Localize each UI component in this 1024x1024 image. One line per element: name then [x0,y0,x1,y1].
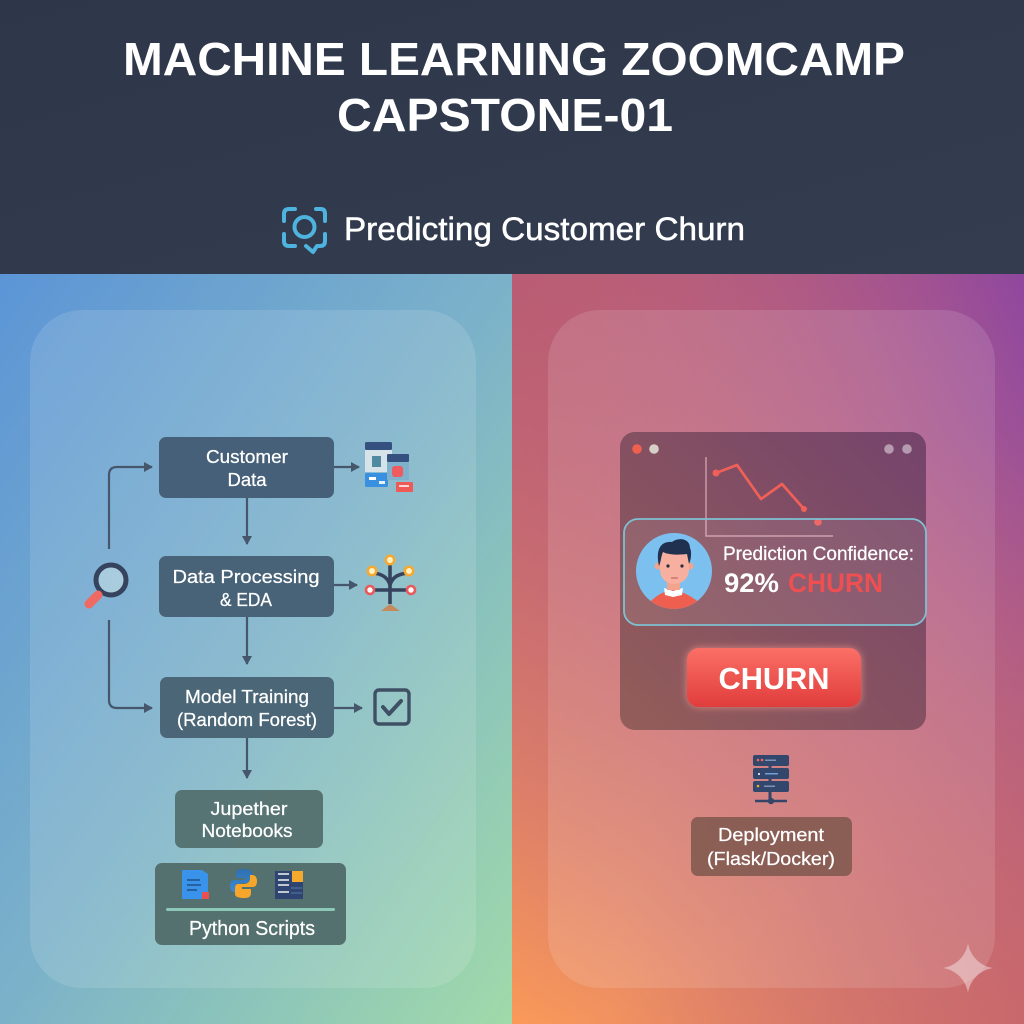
step: customer data [159,437,334,498]
window controls [632,444,912,454]
icon: camera focus speech bubble [284,209,325,252]
panel: ML pipeline card [30,310,476,988]
arrow: customer data to processing [246,498,248,544]
icon: sparkle [943,943,993,993]
header band [0,0,1024,274]
icon: python logo [230,869,257,898]
panel: prediction card [548,310,995,988]
panel: left background [0,274,512,1024]
prediction confidence callout [624,519,926,625]
title: CAPSTONE-01 [337,89,673,141]
step: model training [160,677,334,738]
arrow: processing to icon [334,584,357,586]
churn button [687,648,861,707]
title: MACHINE LEARNING ZOOMCAMP [123,33,905,85]
icon: customer avatar [636,533,712,612]
panel: app window [620,432,926,730]
prediction confidence callout: 92% [724,568,779,598]
deployment label: (Flask/Docker) [707,848,835,869]
arrow: processing to training [246,617,248,664]
icon: decision tree [366,556,415,611]
step: data processing and EDA: Data Processing [172,566,320,587]
step: data processing and EDA: & EDA [220,589,273,610]
subtitle: Predicting Customer Churn [344,211,745,247]
deployment label [691,817,852,876]
arrow: magnifier up to customer data [109,467,152,549]
step: customer data: Data [228,469,267,490]
step: notebooks: Notebooks [202,820,292,841]
step: model training: Model Training [185,686,309,707]
churn button: CHURN [718,661,830,696]
step: customer data: Customer [206,446,288,467]
arrow: training to notebooks [246,738,248,778]
panel: right background [512,274,1024,1024]
deployment label: Deployment [718,824,824,845]
arrow: magnifier down to model training [109,620,152,708]
arrow: customer data to icon [334,466,359,468]
panel: python scripts [155,863,346,945]
arrow: training to icon [334,707,362,709]
step: data processing and EDA [159,556,334,617]
step: notebooks [175,790,323,848]
prediction confidence callout: CHURN [788,568,883,598]
step: notebooks: Jupether [210,798,288,819]
line chart [706,457,833,536]
icon: checkbox [375,690,409,724]
panel: python scripts: Python Scripts [189,918,315,940]
icon: code panel [275,871,303,899]
title [123,33,905,141]
step: model training: (Random Forest) [177,709,317,730]
prediction confidence callout: Prediction Confidence: [723,544,914,565]
icon: document [182,870,209,899]
icon: magnifying glass [89,565,126,604]
icon: server rack [753,755,789,804]
icon: data dashboards [365,442,413,492]
